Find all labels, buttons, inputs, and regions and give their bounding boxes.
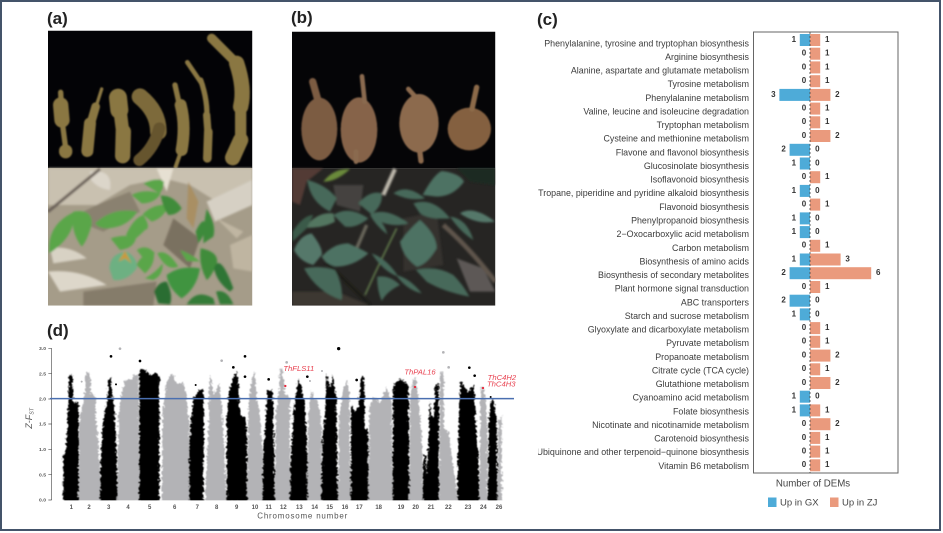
value labels: 0	[802, 200, 807, 209]
chart frame	[754, 32, 898, 473]
pathway labels: Tropane, piperidine and pyridine alkaloid biosynthesis	[538, 188, 750, 198]
value labels: 2	[835, 131, 840, 140]
value labels: 2	[835, 90, 840, 99]
pathway labels: Flavone and flavonol biosynthesis	[616, 147, 750, 157]
chromosome tick labels: 15	[326, 505, 334, 511]
value labels: 0	[802, 49, 807, 58]
value labels: 1	[792, 35, 797, 44]
pathway labels: Arginine biosynthesis	[665, 52, 750, 62]
bars up in GX	[779, 34, 810, 416]
value labels: 1	[825, 323, 830, 332]
value labels: 0	[802, 62, 807, 71]
centre zero line	[809, 32, 811, 473]
value labels: 1	[825, 460, 830, 469]
chromosome tick labels: 9	[235, 505, 239, 511]
y tick labels: 2.5	[39, 371, 46, 377]
value labels: 0	[802, 419, 807, 428]
value labels: 0	[802, 364, 807, 373]
chromosome tick labels: 11	[266, 505, 272, 511]
chromosome tick labels: 8	[215, 505, 219, 511]
gene annotations: ThFLS11	[283, 364, 314, 373]
chromosome tick labels: 18	[375, 505, 383, 511]
panel label d: (d)	[47, 321, 69, 340]
pathway labels: Carotenoid biosynthesis	[654, 434, 750, 444]
legend	[768, 498, 878, 508]
chromosome tick labels: 3	[107, 505, 111, 511]
y tick labels: 0.0	[39, 498, 46, 504]
value labels: 0	[802, 76, 807, 85]
x axis title: Chromosome number	[257, 512, 348, 521]
y axis with ticks	[48, 348, 52, 500]
legend: Up in ZJ	[842, 498, 878, 508]
pathway labels: Starch and sucrose metabolism	[625, 311, 749, 321]
value labels: 2	[835, 351, 840, 360]
y tick labels: 0.5	[39, 472, 46, 478]
pathway labels: Phenylalanine metabolism	[645, 93, 749, 103]
pathway labels: Cyanoamino acid metabolism	[633, 393, 749, 403]
value labels: 2	[781, 268, 786, 277]
value labels: 1	[825, 282, 830, 291]
value labels: 0	[815, 296, 820, 305]
value labels: 0	[802, 172, 807, 181]
gene annotations: ThC4H2	[488, 373, 517, 382]
chromosome tick labels: 1	[70, 505, 74, 511]
pathway labels: Pyruvate metabolism	[666, 338, 749, 348]
chromosome tick labels: 24	[480, 505, 487, 511]
value labels: 2	[835, 378, 840, 387]
value labels: 2	[781, 145, 786, 154]
value labels	[771, 35, 881, 469]
chromosome tick labels: 23	[465, 505, 472, 511]
manhattan points	[63, 368, 502, 502]
value labels: 1	[792, 213, 797, 222]
pathway labels: Propanoate metabolism	[655, 352, 749, 362]
pathway labels: Phenylalanine, tyrosine and tryptophan biosynthesis	[544, 38, 750, 48]
pathway labels: ABC transporters	[681, 297, 750, 307]
panel label b: (b)	[291, 8, 313, 27]
pathway labels: Plant hormone signal transduction	[615, 284, 749, 294]
outlier points	[81, 347, 492, 398]
value labels: 0	[802, 103, 807, 112]
y axis title: ST	[30, 407, 36, 415]
value labels: 0	[815, 145, 820, 154]
gene annotations: ThC4H3	[487, 380, 516, 389]
chromosome tick labels: 17	[356, 505, 363, 511]
pathway labels: Carbon metabolism	[672, 243, 749, 253]
chromosome tick labels: 5	[148, 505, 152, 511]
pathway labels: Tyrosine metabolism	[668, 79, 749, 89]
value labels: 1	[792, 309, 797, 318]
value labels: 1	[825, 433, 830, 442]
chromosome tick labels: 14	[311, 505, 319, 511]
chromosome tick labels: 19	[398, 505, 405, 511]
value labels: 1	[825, 62, 830, 71]
value labels: 1	[825, 35, 830, 44]
pathway labels: Citrate cycle (TCA cycle)	[652, 365, 749, 375]
value labels: 0	[815, 309, 820, 318]
pathway labels: Phenylpropanoid biosynthesis	[631, 216, 750, 226]
y tick labels: 3.0	[39, 346, 46, 352]
value labels: 0	[802, 131, 807, 140]
value labels: 0	[815, 186, 820, 195]
panel a: tubers and plant photos	[48, 31, 252, 306]
value labels: 3	[771, 90, 776, 99]
value labels: 1	[825, 337, 830, 346]
value labels: 0	[802, 460, 807, 469]
value labels: 0	[802, 337, 807, 346]
significance threshold line	[50, 396, 514, 401]
gene annotations: ThPAL16	[404, 367, 436, 376]
value labels: 0	[802, 323, 807, 332]
value labels: 1	[825, 103, 830, 112]
value labels: 0	[802, 447, 807, 456]
pathway labels: Isoflavonoid biosynthesis	[650, 175, 750, 185]
pathway labels: Nicotinate and nicotinamide metabolism	[592, 420, 749, 430]
panel d: Manhattan plot of Z-FST by chromosome	[24, 346, 517, 521]
pathway labels: Glyoxylate and dicarboxylate metabolism	[588, 324, 749, 334]
value labels: 1	[825, 172, 830, 181]
value labels: 1	[825, 241, 830, 250]
value labels: 1	[825, 405, 830, 414]
chromosome tick labels: 12	[280, 505, 287, 511]
chromosome tick labels: 22	[445, 505, 452, 511]
pathway labels: Glutathione metabolism	[656, 379, 749, 389]
photo: slender tubers on black	[48, 31, 252, 168]
value labels: 1	[792, 392, 797, 401]
chromosome tick labels: 7	[196, 505, 200, 511]
value labels: 0	[802, 241, 807, 250]
y tick labels: 1.0	[39, 447, 46, 453]
value labels: 1	[792, 405, 797, 414]
pathway labels: Glucosinolate biosynthesis	[644, 161, 750, 171]
value labels: 0	[815, 213, 820, 222]
bars up in ZJ	[810, 34, 871, 471]
value labels: 1	[792, 158, 797, 167]
chromosome tick labels: 16	[342, 505, 349, 511]
value labels: 0	[815, 392, 820, 401]
x axis title: Number of DEMs	[776, 478, 850, 490]
value labels: 0	[802, 433, 807, 442]
value labels: 1	[825, 117, 830, 126]
y tick labels: 2.0	[39, 397, 46, 403]
chromosome tick labels: 21	[428, 505, 435, 511]
chromosome tick labels	[70, 505, 503, 511]
value labels: 0	[802, 282, 807, 291]
pathway labels: Alanine, aspartate and glutamate metabolism	[571, 66, 749, 76]
value labels: 1	[825, 200, 830, 209]
value labels: 1	[792, 254, 797, 263]
panel c: diverging bar chart of DEMs per pathway	[537, 32, 898, 508]
value labels: 0	[802, 117, 807, 126]
value labels: 0	[815, 227, 820, 236]
gene annotations	[283, 364, 517, 389]
value labels: 1	[792, 186, 797, 195]
value labels: 1	[792, 227, 797, 236]
chromosome tick labels: 13	[296, 505, 303, 511]
y axis title: Z-F	[24, 415, 34, 429]
value labels: 1	[825, 364, 830, 373]
photo: serrated-leaf plant on dark ground	[292, 168, 495, 306]
value labels: 0	[802, 351, 807, 360]
pathway labels	[537, 38, 750, 471]
value labels: 3	[845, 254, 850, 263]
panel label a: (a)	[47, 9, 68, 28]
panel b: tubers and plant photos	[292, 32, 495, 306]
chromosome tick labels: 20	[412, 505, 420, 511]
chromosome tick labels: 4	[126, 505, 130, 511]
y tick labels: 1.5	[39, 422, 46, 428]
value labels: 1	[825, 49, 830, 58]
y tick labels	[39, 346, 46, 504]
value labels: 6	[876, 268, 881, 277]
chromosome tick labels: 6	[173, 505, 177, 511]
photo: round tubers on black	[292, 32, 495, 168]
pathway labels: Biosynthesis of amino acids	[639, 256, 750, 266]
pathway labels: Valine, leucine and isoleucine degradation	[583, 106, 749, 116]
value labels: 1	[825, 447, 830, 456]
photo: green-leaved plant on leaf litter	[48, 168, 252, 306]
pathway labels: Folate biosynthesis	[673, 406, 750, 416]
pathway labels: 2−Oxocarboxylic acid metabolism	[617, 229, 749, 239]
legend: Up in GX	[780, 498, 819, 508]
panel label c: (c)	[537, 10, 558, 29]
value labels: 1	[825, 76, 830, 85]
pathway labels: Ubiquinone and other terpenoid−quinone biosynthesis	[537, 447, 750, 457]
value labels: 0	[815, 158, 820, 167]
pathway labels: Vitamin B6 metabolism	[658, 461, 749, 471]
value labels: 2	[835, 419, 840, 428]
value labels: 0	[802, 378, 807, 387]
chromosome tick labels: 2	[87, 505, 91, 511]
chromosome tick labels: 26	[496, 505, 503, 511]
value labels: 2	[781, 296, 786, 305]
pathway labels: Biosynthesis of secondary metabolites	[598, 270, 750, 280]
chromosome tick labels: 10	[252, 505, 259, 511]
pathway labels: Tryptophan metabolism	[657, 120, 749, 130]
pathway labels: Cysteine and methionine metabolism	[603, 134, 749, 144]
pathway labels: Flavonoid biosynthesis	[659, 202, 750, 212]
